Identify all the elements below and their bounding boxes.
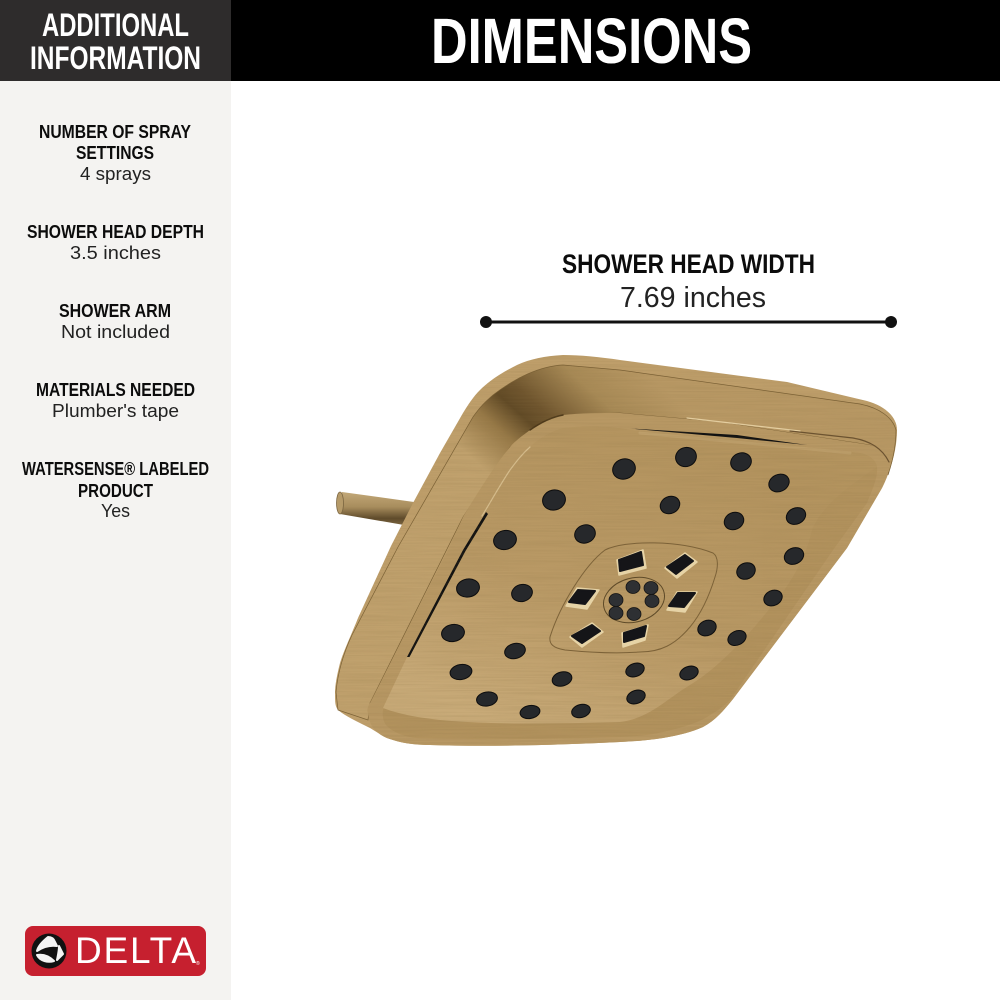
spec: number of spray settings: SETTINGS (76, 142, 154, 163)
spec: watersense labeled product: Yes (101, 501, 130, 521)
logo: delta: ® (196, 960, 200, 967)
top slit shadow (630, 428, 807, 445)
front face band (383, 427, 877, 739)
header bar: additional information: INFORMATION (30, 40, 201, 76)
square jets (566, 550, 697, 647)
spec: shower head depth: SHOWER HEAD DEPTH (27, 221, 204, 242)
center cluster (550, 543, 717, 653)
spec: number of spray settings: 4 sprays (80, 164, 151, 184)
width dimension label: 7.69 inches (620, 282, 766, 314)
shower arm stub (336, 492, 414, 525)
left slit shadow (407, 512, 488, 657)
spec: number of spray settings: NUMBER OF SPRAY (39, 121, 192, 142)
header bar: additional information: ADDITIONAL (42, 7, 189, 43)
spec: number of spray settings (39, 121, 192, 184)
width dimension line (480, 316, 897, 328)
head silhouette and lip (335, 355, 897, 746)
width dimension label (562, 249, 815, 314)
front face dish (383, 427, 877, 723)
logo: delta: DELTA (75, 930, 196, 971)
logo: delta (25, 926, 206, 976)
front rim (367, 413, 889, 746)
spec: shower arm: Not included (61, 322, 170, 342)
spec: watersense labeled product: WATERSENSE® LABELED (22, 458, 209, 479)
recessed back surface with dark corner shading (336, 365, 896, 720)
spec: materials needed (36, 379, 195, 421)
inner nozzles (609, 580, 659, 620)
rim highlights (482, 415, 889, 516)
header bar: dimensions (231, 0, 1000, 81)
spec: shower arm (59, 300, 171, 342)
header bar: dimensions: DIMENSIONS (431, 5, 752, 77)
brushed metal texture (342, 359, 870, 722)
spec: shower arm: SHOWER ARM (59, 300, 171, 321)
spec: materials needed: MATERIALS NEEDED (36, 379, 195, 400)
spec: watersense labeled product: PRODUCT (78, 480, 154, 501)
cluster outline (550, 543, 717, 653)
header bar: additional information (0, 0, 231, 81)
inner ring (598, 571, 670, 629)
spray nozzles (440, 444, 808, 720)
sidebar panel (0, 81, 231, 1000)
spec: materials needed: Plumber's tape (52, 401, 179, 421)
width dimension label: SHOWER HEAD WIDTH (562, 249, 815, 279)
product: shower head (330, 350, 905, 750)
spec: shower head depth (27, 221, 204, 263)
spec: shower head depth: 3.5 inches (70, 243, 161, 263)
spec: watersense labeled product (22, 458, 209, 521)
